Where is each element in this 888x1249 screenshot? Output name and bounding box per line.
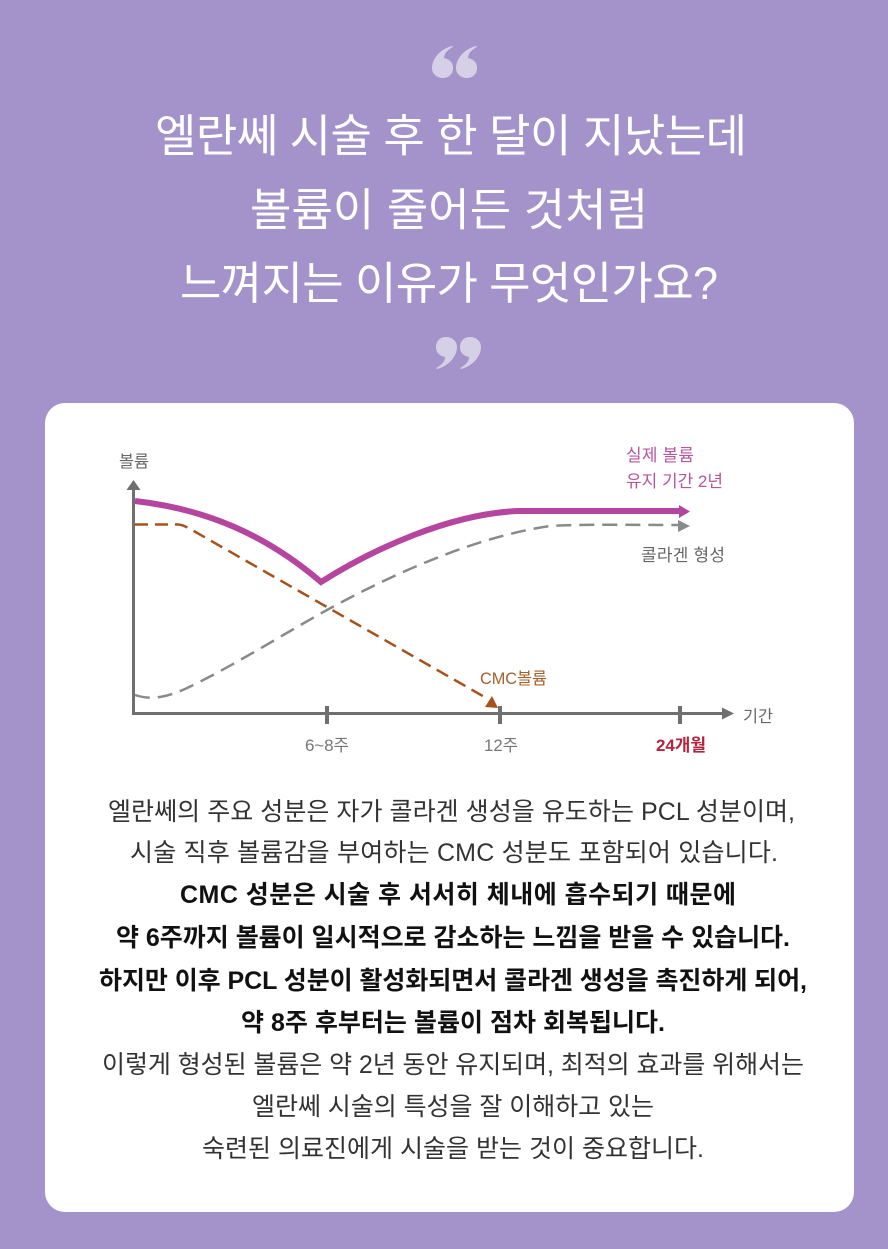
body text: CMC 성분은 시술 후 서서히 체내에 흡수되기 때문에 xyxy=(180,881,736,909)
line chart: volume over time xyxy=(119,446,773,755)
tick label: 12 weeks: 12주 xyxy=(484,736,518,755)
axis label: volume: 볼륨 xyxy=(119,453,149,471)
body text: 약 8주 후부터는 볼륨이 점차 회복됩니다. xyxy=(241,1009,665,1037)
label: actual volume duration xyxy=(626,446,723,491)
label: actual volume duration: 실제 볼륨 xyxy=(626,446,694,465)
body text: 엘란쎄의 주요 성분은 자가 콜라겐 생성을 유도하는 PCL 성분이며, xyxy=(108,798,795,826)
axes xyxy=(126,480,734,724)
title: 느껴지는 이유가 무엇인가요? xyxy=(180,258,718,309)
label: collagen formation: 콜라겐 형성 xyxy=(641,546,725,565)
label: actual volume duration: 유지 기간 2년 xyxy=(626,472,723,491)
line: collagen formation xyxy=(135,520,690,698)
tick label: 24 months: 24개월 xyxy=(656,736,706,755)
body text: 엘란쎄 시술의 특성을 잘 이해하고 있는 xyxy=(252,1093,654,1121)
body text: 이렇게 형성된 볼륨은 약 2년 동안 유지되며, 최적의 효과를 위해서는 xyxy=(102,1051,804,1079)
title: 엘란쎄 시술 후 한 달이 지났는데 xyxy=(155,110,747,162)
tick label: 6 to 8 weeks: 6~8주 xyxy=(305,736,349,755)
line: actual volume xyxy=(135,501,690,582)
body text: 시술 직후 볼륨감을 부여하는 CMC 성분도 포함되어 있습니다. xyxy=(130,839,778,867)
label: CMC volume: CMC볼륨 xyxy=(480,670,547,688)
panel: explanation card xyxy=(45,403,854,1212)
axis label: period: 기간 xyxy=(743,708,773,726)
body text: 하지만 이후 PCL 성분이 활성화되면서 콜라겐 생성을 촉진하게 되어, xyxy=(99,967,807,995)
line: CMC volume xyxy=(135,524,498,708)
icon: closing quotation mark xyxy=(436,337,481,369)
title: 볼륨이 줄어든 것처럼 xyxy=(250,184,648,236)
body text: 약 6주까지 볼륨이 일시적으로 감소하는 느낌을 받을 수 있습니다. xyxy=(116,924,790,952)
icon: opening quotation mark xyxy=(432,46,477,78)
body text xyxy=(99,798,807,1163)
title xyxy=(155,110,747,309)
body text: 숙련된 의료진에게 시술을 받는 것이 중요합니다. xyxy=(202,1135,704,1163)
